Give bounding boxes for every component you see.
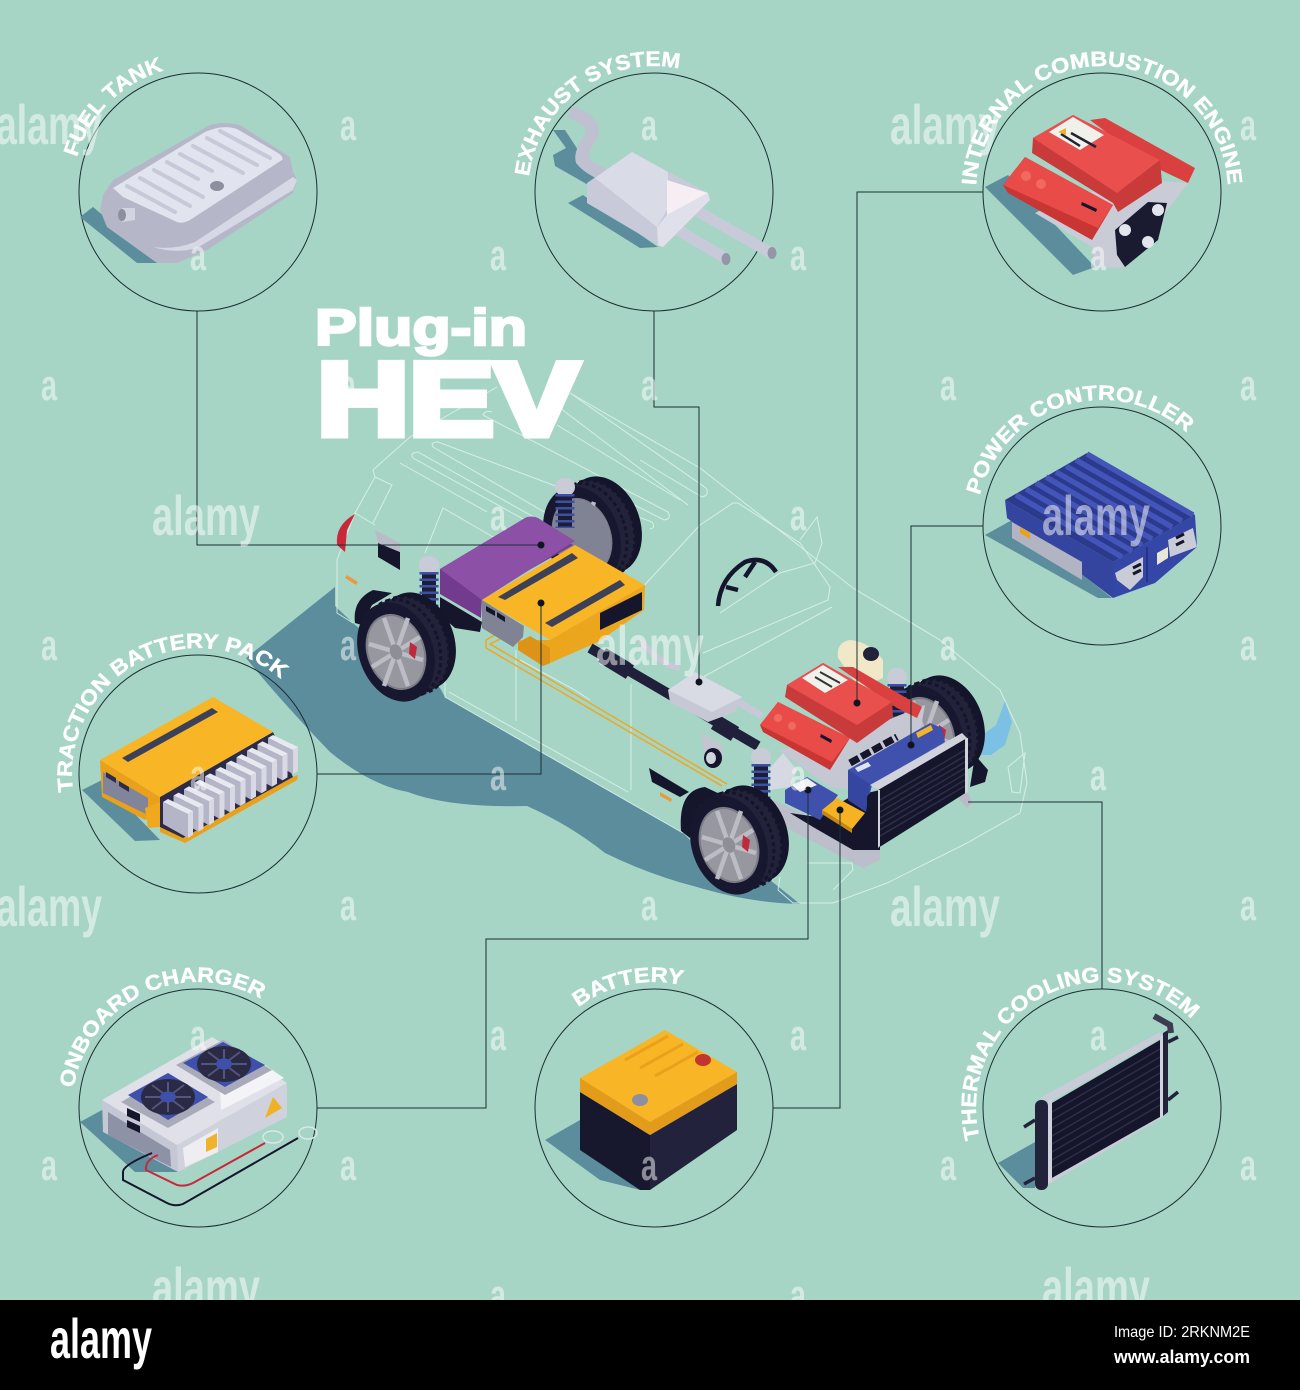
coolant tank: [838, 640, 883, 688]
watermarks: a: [490, 231, 506, 280]
traction battery in car: [482, 545, 645, 666]
watermarks: a: [41, 621, 57, 670]
watermarks: a: [490, 751, 506, 800]
panel: battery: [534, 967, 774, 1228]
watermarks: a: [790, 751, 806, 800]
watermarks: a: [340, 361, 356, 410]
front far wheel: [873, 665, 998, 796]
watermarks: a: [641, 881, 657, 930]
watermarks: a: [790, 1011, 806, 1060]
website: www.alamy.com: [1113, 1347, 1250, 1367]
car shadow: [246, 587, 800, 904]
watermarks: a: [790, 491, 806, 540]
mirror and hub: [702, 733, 722, 768]
watermarks: a: [641, 361, 657, 410]
title: HEV: [317, 342, 579, 458]
title: Plug-in: [315, 299, 527, 356]
watermarks: alamy: [596, 614, 704, 677]
label: internal combustion engine: INTERNAL COMBUSTION ENGINE: [962, 51, 1242, 184]
panel: traction battery pack: [57, 633, 318, 894]
front near wheel: [677, 775, 802, 906]
watermarks: a: [490, 1271, 506, 1320]
watermarks: alamy: [1042, 484, 1150, 547]
rear near spring: [419, 556, 439, 606]
connector dots: [538, 542, 914, 814]
watermarks: a: [190, 751, 206, 800]
watermarks: a: [790, 231, 806, 280]
watermarks: a: [340, 101, 356, 150]
rear axle: [440, 597, 482, 632]
drive shaft: [590, 648, 758, 746]
icon: engine: [985, 115, 1195, 275]
exhaust muffler in car: [640, 640, 762, 722]
watermarks: a: [940, 361, 956, 410]
icon: power controller: [985, 453, 1197, 598]
panel: exhaust system: [514, 51, 776, 312]
internal combustion engine in car: [760, 663, 922, 770]
connector lines: [197, 192, 1102, 1108]
label: onboard charger: ONBOARD CHARGER: [60, 967, 266, 1086]
power controller in car: [848, 723, 945, 812]
watermarks: alamy: [0, 93, 102, 156]
front near fender and trim: [649, 768, 722, 838]
steering wheel: [718, 560, 776, 606]
icon: traction battery: [82, 697, 298, 843]
icon: exhaust: [553, 112, 776, 265]
gold high-voltage wires: [486, 632, 727, 786]
front far spring: [887, 668, 907, 718]
title: [315, 299, 579, 458]
watermarks: a: [790, 1271, 806, 1320]
front base plate: [767, 790, 880, 868]
panel: power controller: [966, 385, 1222, 646]
footer logo: alamy: [50, 1307, 152, 1370]
watermarks: a: [1240, 621, 1256, 670]
rear near wheel: [344, 582, 469, 713]
icon: car battery: [545, 1030, 737, 1190]
label: thermal cooling system: THERMAL COOLING SYSTEM: [961, 968, 1200, 1142]
watermarks: a: [940, 1141, 956, 1190]
small charger in car: [785, 777, 838, 820]
watermarks: a: [940, 621, 956, 670]
engine grey block: [778, 705, 925, 790]
watermarks: alamy: [152, 1256, 260, 1319]
watermarks: alamy: [1042, 1256, 1150, 1319]
watermarks: alamy: [152, 484, 260, 547]
watermarks: a: [190, 231, 206, 280]
small battery in car: [822, 798, 865, 833]
watermarks: a: [1090, 231, 1106, 280]
car outline: [337, 387, 1027, 903]
watermarks: a: [340, 881, 356, 930]
image id: Image ID: 2RKNM2E: [1114, 1324, 1250, 1341]
hub and knuckle: [770, 753, 797, 790]
icon: onboard charger: [80, 1037, 317, 1205]
label: battery: BATTERY: [571, 967, 685, 1006]
label: power controller: POWER CONTROLLER: [966, 385, 1194, 494]
watermarks: a: [1240, 1141, 1256, 1190]
watermarks: a: [490, 1011, 506, 1060]
watermarks: a: [1240, 881, 1256, 930]
watermarks: a: [41, 1141, 57, 1190]
watermarks: alamy: [890, 875, 1000, 938]
watermarks: a: [641, 1141, 657, 1190]
watermarks: a: [1240, 101, 1256, 150]
watermarks: alamy: [0, 875, 102, 938]
rear far wheel: [530, 466, 655, 597]
fuel tank in car: [440, 516, 575, 618]
watermarks: a: [1090, 751, 1106, 800]
watermarks: a: [190, 1011, 206, 1060]
footer bar: [0, 1300, 1300, 1390]
icon: fuel tank: [80, 123, 297, 263]
panel: internal combustion engine: [962, 51, 1242, 312]
watermarks: a: [340, 621, 356, 670]
panel: thermal cooling system: [961, 968, 1222, 1228]
label: exhaust system: EXHAUST SYSTEM: [514, 51, 680, 176]
watermarks: a: [490, 491, 506, 540]
watermarks: a: [1090, 1011, 1106, 1060]
watermarks: a: [41, 361, 57, 410]
radiator in car: [867, 733, 972, 848]
watermarks: alamy: [890, 93, 1000, 156]
icon: radiator: [998, 1016, 1178, 1190]
rear far spring: [555, 478, 575, 528]
label: traction battery pack: TRACTION BATTERY PACK: [57, 633, 290, 793]
watermarks: a: [641, 101, 657, 150]
engine belts: [850, 737, 897, 763]
watermarks: a: [340, 1141, 356, 1190]
front near spring: [751, 748, 771, 798]
watermarks: a: [1240, 361, 1256, 410]
windscreen washer blue piece: [976, 701, 1012, 755]
tail light and trim: [337, 514, 400, 625]
panel: onboard charger: [60, 967, 318, 1228]
label: fuel tank: FUEL TANK: [63, 56, 164, 156]
panel: fuel tank: [63, 56, 318, 312]
